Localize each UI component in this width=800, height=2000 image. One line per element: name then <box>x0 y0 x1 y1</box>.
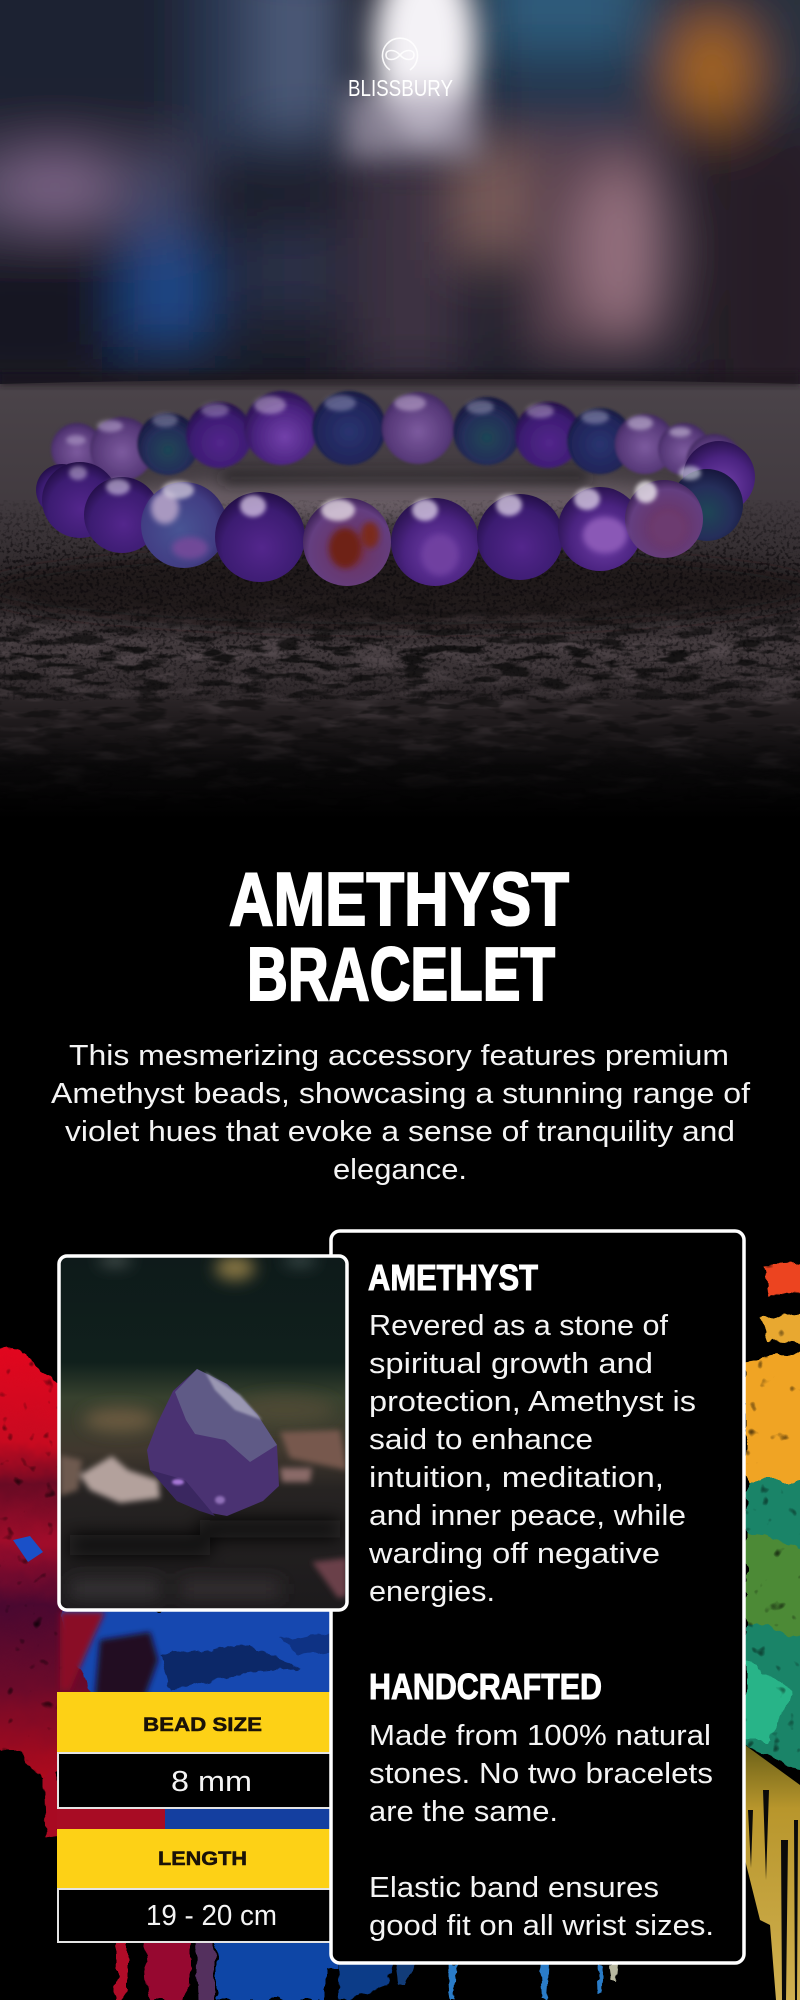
paint splash background: left red and blue <box>0 1348 345 1838</box>
panel: raw amethyst photo <box>58 1255 347 1610</box>
text: handcrafted description: good fit on all wrist sizes. <box>369 1910 714 1942</box>
intro paragraph: This mesmerizing accessory features premium <box>69 1040 729 1072</box>
bracelet beads <box>36 391 755 586</box>
icon: infinity in circle <box>382 38 418 70</box>
spec table <box>57 1692 338 1942</box>
bead inclusions <box>151 492 686 575</box>
text: amethyst description: Revered as a stone of <box>369 1310 669 1342</box>
text: amethyst description: said to enhance <box>369 1424 593 1456</box>
bead highlights <box>69 466 701 521</box>
heading: handcrafted: HANDCRAFTED <box>369 1666 602 1707</box>
bright window column <box>345 0 480 160</box>
text: amethyst description: energies. <box>369 1576 495 1608</box>
heading: amethyst: AMETHYST <box>368 1257 538 1298</box>
logo: Blissbury <box>348 38 453 101</box>
text: handcrafted description <box>369 1720 714 1942</box>
text: amethyst description: and inner peace, while <box>369 1500 686 1532</box>
paint drips along the bottom <box>116 1940 618 2000</box>
title: AMETHYST <box>229 857 569 941</box>
brand name: BLISSBURY <box>348 75 453 101</box>
spec: bead size: 8 mm <box>171 1766 252 1798</box>
back row of beads <box>51 391 742 490</box>
spec: bead size: BEAD SIZE <box>143 1715 262 1736</box>
back row highlights <box>66 395 691 445</box>
bead contact shadows <box>220 470 590 486</box>
text: amethyst description: intuition, meditation, <box>369 1462 664 1494</box>
paint blue patch <box>13 1536 43 1562</box>
leaves <box>60 1430 347 1598</box>
text: amethyst description <box>368 1310 696 1608</box>
title: BRACELET <box>247 932 555 1016</box>
panel: description <box>331 1231 744 1963</box>
blurred bokeh backdrop <box>0 0 800 420</box>
text: handcrafted description: stones. No two bracelets <box>369 1758 713 1790</box>
text: amethyst description: spiritual growth and <box>369 1348 653 1380</box>
spec: length <box>57 1829 338 1942</box>
paint dark hollow <box>95 1632 158 1696</box>
text: handcrafted description: Made from 100% natural <box>369 1720 711 1752</box>
spec: length: 19 - 20 cm <box>146 1900 277 1932</box>
paint splash lower band <box>44 1760 335 1838</box>
icon: raw amethyst stone <box>147 1369 279 1516</box>
ground mottling <box>70 1520 340 1596</box>
spec: bead size <box>57 1692 338 1808</box>
intro paragraph: Amethyst beads, showcasing a stunning range of <box>51 1078 751 1110</box>
spec: length: LENGTH <box>158 1849 247 1870</box>
text: amethyst description: warding off negative <box>368 1538 660 1570</box>
paint blue field <box>62 1610 345 1700</box>
blurred bokeh <box>84 1255 335 1432</box>
title <box>229 857 569 1016</box>
intro paragraph: violet hues that evoke a sense of tranquility and <box>65 1116 735 1148</box>
stone surface <box>0 372 800 820</box>
photo border <box>59 1256 347 1610</box>
intro paragraph <box>51 1040 751 1186</box>
front row of beads <box>36 441 755 586</box>
text: amethyst description: protection, Amethyst is <box>369 1386 696 1418</box>
text: handcrafted description: Elastic band ensures <box>369 1872 659 1904</box>
intro paragraph: elegance. <box>333 1154 467 1186</box>
paint splash: right orange green gold <box>745 1262 800 2000</box>
hero photo: amethyst bracelet on stone <box>0 0 800 820</box>
text: handcrafted description: are the same. <box>369 1796 558 1828</box>
